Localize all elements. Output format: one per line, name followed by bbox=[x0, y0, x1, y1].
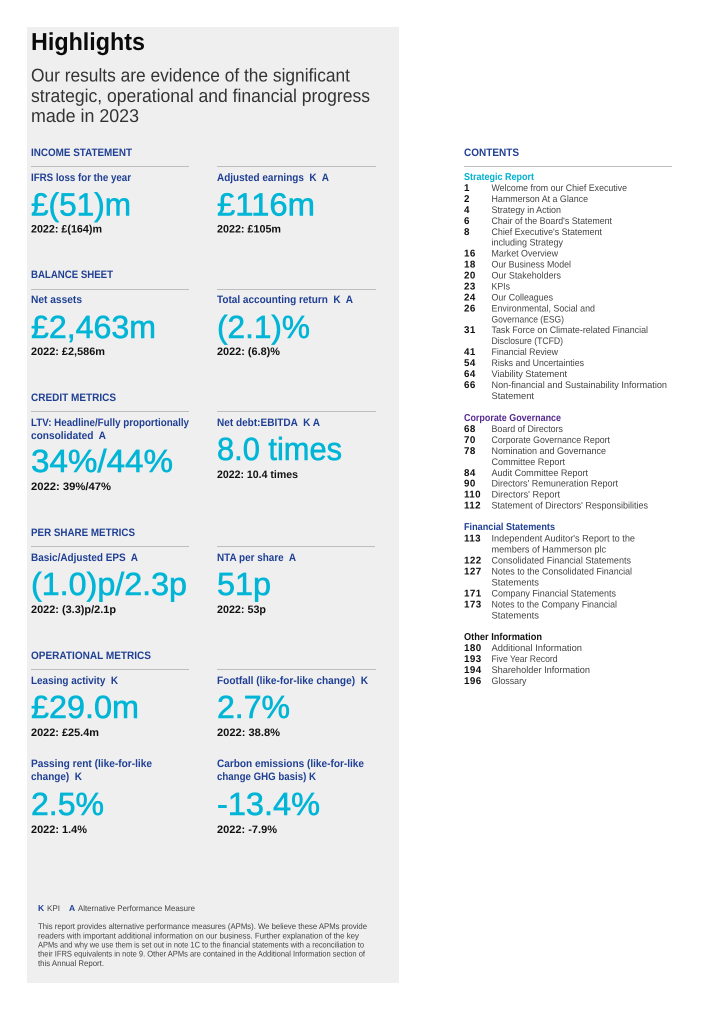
contents: strategic report: 18 bbox=[464, 260, 476, 271]
metric: carbon emissions: 2022: -7.9% bbox=[217, 824, 277, 836]
contents: other information: 196 bbox=[464, 676, 482, 687]
contents: strategic report: Environmental, Social and bbox=[492, 303, 595, 314]
contents: financial statements: 171 bbox=[464, 588, 482, 600]
metric: IFRS loss: IFRS loss for the year bbox=[31, 172, 132, 184]
metric: total accounting return: Total accounting return K A bbox=[217, 294, 353, 306]
contents: strategic report: 31 bbox=[464, 325, 476, 336]
legend: KPI and APM keys bbox=[38, 903, 195, 913]
footnote text: This report provides alternative performance measures (APMs). We believe these APMs provide bbox=[38, 922, 367, 931]
panel: balance sheet bbox=[31, 269, 376, 358]
contents: financial statements: Financial Statements bbox=[464, 522, 555, 533]
metric: net debt EBITDA: 8.0 times bbox=[217, 431, 342, 467]
contents: strategic report: Our Colleagues bbox=[492, 292, 553, 303]
metric: LTV bbox=[31, 417, 189, 493]
metric: net assets: £2,463m bbox=[31, 309, 156, 345]
contents: other information: Glossary bbox=[492, 676, 527, 687]
contents: corporate governance: Audit Committee Report bbox=[492, 468, 588, 479]
contents: corporate governance: 78 bbox=[464, 446, 476, 457]
contents: other information: Other Information bbox=[464, 632, 542, 643]
contents: strategic report: Viability Statement bbox=[492, 369, 567, 380]
legend: KPI and APM keys: Alternative Performance Measure bbox=[78, 904, 195, 913]
contents: financial statements: Independent Auditor's Report to the bbox=[492, 534, 635, 544]
metric: EPS: Basic/Adjusted EPS A bbox=[31, 552, 138, 564]
metric: total accounting return bbox=[217, 294, 353, 358]
metric: EPS: (1.0)p/2.3p bbox=[31, 566, 187, 602]
contents: strategic report: 24 bbox=[464, 292, 476, 303]
contents: strategic report: Governance (ESG) bbox=[492, 314, 564, 325]
metric: NTA per share: NTA per share A bbox=[217, 552, 296, 564]
contents: strategic report: 66 bbox=[464, 380, 476, 391]
contents: strategic report: Market Overview bbox=[492, 249, 558, 260]
metric: leasing activity: 2022: £25.4m bbox=[31, 727, 99, 739]
contents: strategic report: 26 bbox=[464, 303, 476, 314]
contents: strategic report: Financial Review bbox=[492, 347, 558, 358]
title: Highlights bbox=[31, 29, 145, 56]
metric: footfall: Footfall (like-for-like change) K bbox=[217, 675, 368, 687]
contents: strategic report: Welcome from our Chief Executive bbox=[492, 183, 627, 194]
metric: carbon emissions: Carbon emissions (like-for-like bbox=[217, 758, 364, 770]
panel: credit metrics bbox=[31, 392, 376, 493]
contents: other information bbox=[464, 632, 590, 687]
contents: corporate governance: Directors' Report bbox=[492, 490, 560, 500]
contents: corporate governance: Corporate Governance bbox=[464, 413, 561, 424]
panel: operational metrics bbox=[31, 650, 376, 836]
metric: NTA per share: 51p bbox=[217, 566, 271, 602]
metric: adjusted earnings bbox=[217, 172, 329, 236]
contents: strategic report: Hammerson At a Glance bbox=[492, 194, 588, 205]
contents: strategic report: Chief Executive's Statement bbox=[492, 227, 602, 238]
footnote text: APMs and why we use them is set out in note 1C to the financial statements with a reconciliation to bbox=[38, 940, 364, 950]
metric: carbon emissions: change GHG basis) K bbox=[217, 771, 316, 783]
footnote text: their IFRS equivalents in note 9. Other APMs are contained in the Additional Information section of bbox=[38, 950, 366, 958]
contents: strategic report bbox=[464, 172, 667, 402]
contents: strategic report: 4 bbox=[464, 205, 470, 216]
legend: KPI and APM keys: KPI bbox=[47, 904, 60, 913]
metric: footfall bbox=[217, 675, 368, 739]
contents: strategic report: 54 bbox=[464, 358, 476, 369]
contents: other information: Five Year Record bbox=[492, 654, 558, 665]
contents: strategic report: 41 bbox=[464, 347, 476, 358]
contents: corporate governance: 84 bbox=[464, 468, 476, 479]
contents: strategic report: Our Business Model bbox=[492, 260, 571, 271]
contents: corporate governance: Board of Directors bbox=[492, 424, 563, 435]
intro text: Our results are evidence of the significant bbox=[31, 64, 350, 86]
panel: income statement: INCOME STATEMENT bbox=[31, 147, 132, 159]
contents panel bbox=[464, 147, 672, 687]
metric: passing rent: 2.5% bbox=[31, 786, 104, 822]
contents: strategic report: 64 bbox=[464, 369, 476, 380]
contents: corporate governance: 68 bbox=[464, 424, 476, 435]
metric: EPS: 2022: (3.3)p/2.1p bbox=[31, 604, 116, 616]
contents: other information: Shareholder Information bbox=[492, 665, 590, 676]
contents: strategic report: Risks and Uncertainties bbox=[492, 358, 584, 369]
contents: corporate governance: 90 bbox=[464, 478, 476, 490]
intro text: made in 2023 bbox=[31, 105, 139, 126]
contents: strategic report: including Strategy bbox=[492, 238, 563, 249]
contents: strategic report: Strategy in Action bbox=[492, 205, 561, 216]
contents: strategic report: 20 bbox=[464, 270, 476, 282]
contents: corporate governance: 110 bbox=[464, 490, 481, 500]
contents: other information: 193 bbox=[464, 654, 482, 665]
contents: financial statements: Statements bbox=[492, 610, 539, 622]
contents: strategic report: Strategic Report bbox=[464, 172, 535, 183]
metric: passing rent: Passing rent (like-for-like bbox=[31, 758, 152, 770]
contents: corporate governance: 112 bbox=[464, 500, 481, 512]
metric: leasing activity: £29.0m bbox=[31, 689, 139, 725]
metric: carbon emissions: -13.4% bbox=[217, 786, 320, 822]
contents: financial statements: 122 bbox=[464, 556, 482, 566]
legend: KPI and APM keys: K bbox=[38, 903, 45, 913]
metric: net assets: Net assets bbox=[31, 294, 82, 306]
contents: financial statements: Statements bbox=[492, 578, 539, 588]
contents: corporate governance: Committee Report bbox=[492, 457, 565, 468]
contents: financial statements: Consolidated Financial Statements bbox=[492, 556, 631, 566]
metric: LTV: 2022: 39%/47% bbox=[31, 481, 111, 493]
metric: LTV: LTV: Headline/Fully proportionally bbox=[31, 417, 189, 429]
contents: other information: 180 bbox=[464, 643, 482, 654]
contents: corporate governance: Nomination and Governance bbox=[492, 446, 606, 457]
metric: total accounting return: (2.1)% bbox=[217, 309, 310, 345]
panel: operational metrics: OPERATIONAL METRICS bbox=[31, 650, 151, 662]
metric: passing rent: 2022: 1.4% bbox=[31, 824, 87, 836]
footnote text: this Annual Report. bbox=[38, 959, 104, 968]
metric: passing rent: change) K bbox=[31, 771, 82, 783]
contents: strategic report: Disclosure (TCFD) bbox=[492, 336, 563, 347]
metric: adjusted earnings: 2022: £105m bbox=[217, 224, 281, 236]
footnote text bbox=[38, 922, 367, 968]
panel: balance sheet: BALANCE SHEET bbox=[31, 269, 113, 281]
metric: net debt EBITDA: Net debt:EBITDA K A bbox=[217, 417, 320, 429]
panel: per share metrics bbox=[31, 527, 375, 616]
metric: passing rent bbox=[31, 758, 152, 836]
metric: net debt EBITDA bbox=[217, 417, 342, 481]
metric: adjusted earnings: Adjusted earnings K A bbox=[217, 172, 329, 184]
contents: corporate governance: Statement of Directors' Responsibilities bbox=[492, 500, 648, 512]
panel: credit metrics: CREDIT METRICS bbox=[31, 392, 116, 404]
contents: other information: Additional Information bbox=[492, 643, 582, 654]
contents: financial statements: Notes to the Company Financial bbox=[492, 600, 617, 610]
contents: strategic report: Non-financial and Sustainability Information bbox=[492, 380, 667, 391]
metric: LTV: consolidated A bbox=[31, 430, 106, 442]
metric: NTA per share: 2022: 53p bbox=[217, 604, 266, 616]
legend: KPI and APM keys: A bbox=[69, 903, 75, 913]
metric: IFRS loss bbox=[31, 172, 132, 236]
contents: corporate governance bbox=[464, 413, 648, 512]
footnote text: readers with important additional information on our business. Further explanation of the key bbox=[38, 932, 360, 940]
contents: financial statements: 173 bbox=[464, 600, 482, 610]
contents: financial statements: 113 bbox=[464, 534, 481, 544]
intro text: strategic, operational and financial progress bbox=[31, 85, 370, 106]
metric: net assets: 2022: £2,586m bbox=[31, 346, 105, 358]
contents: financial statements: Company Financial Statements bbox=[492, 588, 616, 600]
contents: strategic report: KPIs bbox=[492, 282, 510, 292]
metric: net debt EBITDA: 2022: 10.4 times bbox=[217, 469, 298, 481]
metric: net assets bbox=[31, 294, 156, 358]
metric: LTV: 34%/44% bbox=[31, 443, 173, 479]
contents: financial statements bbox=[464, 522, 635, 622]
contents: strategic report: Statement bbox=[492, 391, 534, 402]
metric: footfall: 2.7% bbox=[217, 689, 290, 725]
metric: carbon emissions bbox=[217, 758, 364, 836]
contents: strategic report: 23 bbox=[464, 282, 476, 292]
metric: total accounting return: 2022: (6.8)% bbox=[217, 346, 280, 358]
contents: strategic report: Our Stakeholders bbox=[492, 270, 561, 282]
contents: corporate governance: 70 bbox=[464, 435, 476, 446]
intro text bbox=[31, 64, 370, 126]
contents: financial statements: members of Hammerson plc bbox=[492, 544, 606, 556]
metric: adjusted earnings: £116m bbox=[217, 186, 315, 222]
contents: corporate governance: Directors' Remuneration Report bbox=[492, 478, 618, 490]
panel: income statement bbox=[31, 147, 376, 236]
metric: IFRS loss: £(51)m bbox=[31, 186, 131, 222]
contents: other information: 194 bbox=[464, 665, 482, 676]
contents: corporate governance: Corporate Governance Report bbox=[492, 435, 610, 446]
metric: NTA per share bbox=[217, 552, 296, 616]
contents: strategic report: 8 bbox=[464, 227, 470, 238]
metric: leasing activity bbox=[31, 675, 139, 739]
contents: strategic report: 6 bbox=[464, 216, 470, 227]
contents: strategic report: Task Force on Climate-related Financial bbox=[492, 325, 648, 336]
contents: strategic report: 1 bbox=[464, 183, 470, 194]
contents: financial statements: 127 bbox=[464, 566, 482, 578]
metric: IFRS loss: 2022: £(164)m bbox=[31, 224, 102, 236]
contents: financial statements: Notes to the Consolidated Financial bbox=[492, 566, 632, 578]
metric: leasing activity: Leasing activity K bbox=[31, 675, 118, 687]
metric: footfall: 2022: 38.8% bbox=[217, 727, 280, 739]
contents: strategic report: Chair of the Board's Statement bbox=[492, 216, 612, 227]
panel: per share metrics: PER SHARE METRICS bbox=[31, 527, 135, 539]
panel: highlights background bbox=[27, 27, 399, 983]
contents panel: CONTENTS bbox=[464, 147, 519, 159]
contents: strategic report: 2 bbox=[464, 194, 470, 205]
metric: EPS bbox=[31, 552, 187, 616]
contents: strategic report: 16 bbox=[464, 249, 476, 260]
